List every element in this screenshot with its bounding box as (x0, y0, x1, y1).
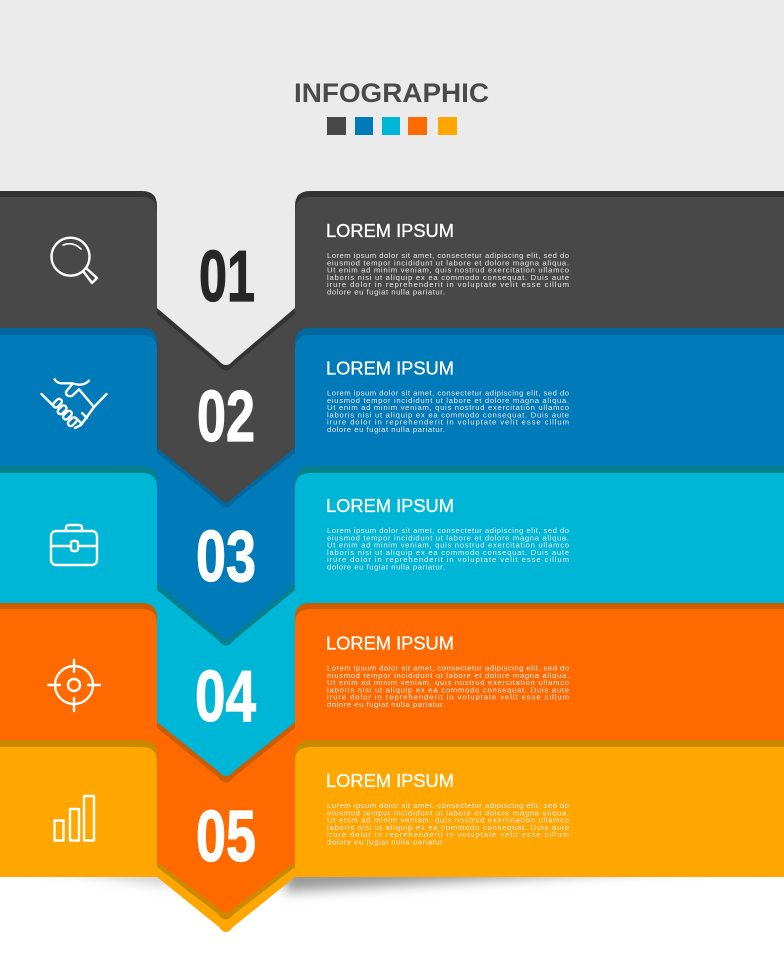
arrow 05 (157, 680, 295, 920)
icon: bar chart (54, 796, 94, 840)
colour legend squares (327, 117, 457, 135)
text block 1: LOREM IPSUM (326, 221, 454, 241)
arrow 02 (157, 260, 295, 508)
text block 3: Lorem ipsum dolor sit amet, consectetur adipiscing elit, sed do (327, 526, 569, 535)
text block 1: Lorem ipsum dolor sit amet, consectetur adipiscing elit, sed do (327, 251, 569, 260)
text block 2: Lorem ipsum dolor sit amet, consectetur adipiscing elit, sed do (327, 388, 569, 398)
text block 5: laboris nisi ut aliquip ex ea commodo consequat. Duis aute (327, 823, 569, 832)
text block 3 (326, 496, 569, 572)
text block 3: laboris nisi ut aliquip ex ea commodo consequat. Duis aute (327, 548, 569, 557)
icon: briefcase (51, 525, 97, 565)
text block 2: dolore eu fugiat nulla pariatur. (327, 425, 445, 434)
text block 2: LOREM IPSUM (326, 358, 454, 378)
text block 1 (326, 221, 569, 296)
text block 1: irure dolor in reprehenderit in voluptate velit esse cillum (327, 280, 569, 289)
text block 3: irure dolor in reprehenderit in voluptate velit esse cillum (327, 555, 569, 564)
text block 1: Ut enim ad minim veniam, quis nostrud exercitation ullamco (327, 266, 569, 275)
text block 4: Ut enim ad minim veniam, quis nostrud exercitation ullamco (327, 678, 569, 687)
arrow 01: 01 (199, 237, 255, 317)
text block 5: eiusmod tempor incididunt ut labore et dolore magna aliqua. (327, 808, 569, 817)
arrow 04: 04 (195, 657, 256, 737)
text block 3: eiusmod tempor incididunt ut labore et dolore magna aliqua. (327, 533, 569, 542)
text block 3: dolore eu fugiat nulla pariatur. (327, 562, 445, 572)
text block 5: dolore eu fugiat nulla pariatur. (327, 838, 445, 846)
text block 3: Ut enim ad minim veniam, quis nostrud exercitation ullamco (327, 541, 569, 550)
text block 2: Ut enim ad minim veniam, quis nostrud exercitation ullamco (327, 403, 569, 412)
arrow 01 (157, 180, 295, 370)
arrow 03: 03 (196, 517, 256, 597)
text block 1: dolore eu fugiat nulla pariatur. (327, 288, 445, 296)
text block 3: LOREM IPSUM (326, 496, 454, 516)
arrow 05: 05 (196, 797, 256, 877)
text block 5 (326, 771, 569, 846)
band 2 panels (0, 328, 784, 483)
text block 5: LOREM IPSUM (326, 771, 454, 791)
text block 4 (326, 634, 569, 709)
band 5 panels with bottom arrow (0, 740, 784, 932)
text block 2 (326, 358, 569, 434)
text block 4: LOREM IPSUM (326, 634, 454, 654)
text block 2: eiusmod tempor incididunt ut labore et dolore magna aliqua. (327, 396, 569, 405)
bottom drop shadow (73, 877, 662, 900)
arrow 04 (157, 540, 295, 782)
band 1 panels (0, 191, 784, 345)
band 4 panels (0, 603, 784, 760)
title: INFOGRAPHIC (294, 78, 489, 108)
icon: target (48, 660, 100, 711)
text block 1: eiusmod tempor incididunt ut labore et dolore magna aliqua. (327, 258, 569, 267)
text block 5: Lorem ipsum dolor sit amet, consectetur adipiscing elit, sed do (327, 801, 569, 810)
text block 4: irure dolor in reprehenderit in voluptate velit esse cillum (327, 693, 569, 702)
text block 4: dolore eu fugiat nulla pariatur. (327, 700, 445, 709)
text block 5: irure dolor in reprehenderit in voluptate velit esse cillum (327, 830, 569, 839)
text block 5: Ut enim ad minim veniam, quis nostrud exercitation ullamco (327, 816, 569, 825)
icon: magnifier (52, 238, 97, 283)
arrow 02: 02 (197, 377, 255, 457)
band 3 panels (0, 466, 784, 620)
text block 4: Lorem ipsum dolor sit amet, consectetur adipiscing elit, sed do (327, 664, 569, 672)
icon: handshake (42, 379, 106, 428)
text block 1: laboris nisi ut aliquip ex ea commodo consequat. Duis aute (327, 273, 569, 282)
text block 4: eiusmod tempor incididunt ut labore et dolore magna aliqua. (327, 671, 569, 680)
text block 4: laboris nisi ut aliquip ex ea commodo consequat. Duis aute (327, 686, 569, 694)
text block 2: irure dolor in reprehenderit in voluptate velit esse cillum (327, 418, 569, 427)
arrow 03 (157, 400, 295, 646)
text block 2: laboris nisi ut aliquip ex ea commodo consequat. Duis aute (327, 410, 569, 420)
